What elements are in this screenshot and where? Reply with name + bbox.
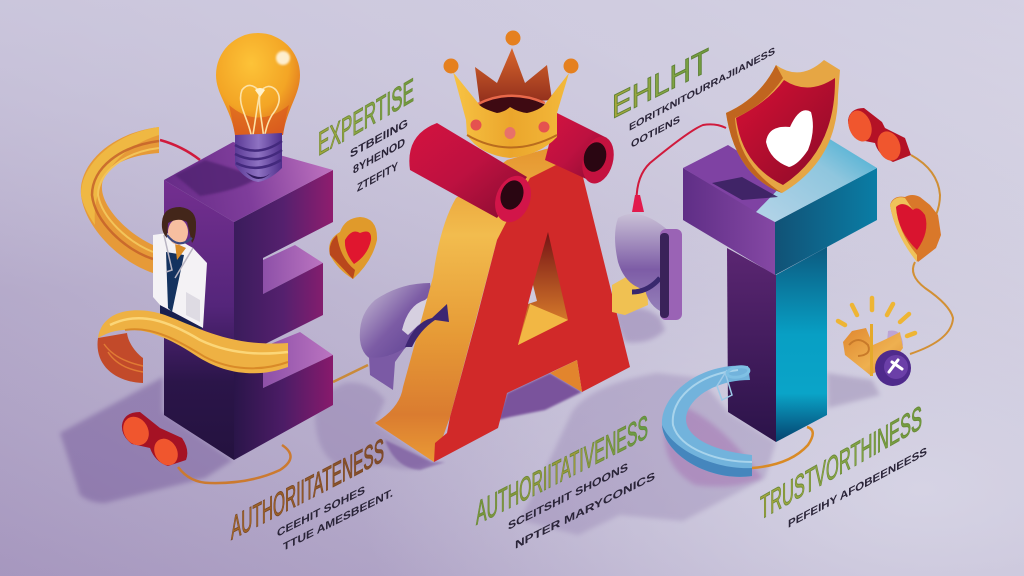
cylinders and crown (409, 30, 619, 227)
T bar left face (683, 168, 775, 275)
A red front (434, 158, 630, 462)
A lower orange notch (550, 360, 582, 392)
floor shadows (60, 308, 880, 535)
right cylinder (545, 113, 619, 187)
text block: centre authoritativeness notes (508, 460, 655, 552)
right clamp (612, 214, 682, 320)
text block: expertise notes (350, 116, 408, 195)
A orange side face (375, 147, 570, 462)
icon: right red connector (844, 107, 911, 164)
T bar right face (775, 168, 877, 275)
E left face (164, 180, 234, 460)
T stem left (727, 248, 776, 442)
left clamp arm (405, 304, 449, 347)
T top blue (756, 138, 877, 222)
E right face (234, 170, 333, 365)
text block: centre authoritativeness notes: SCEITSHIT SHOONS (508, 460, 628, 533)
icon: gold heart with rays and button (838, 298, 915, 386)
text block: expertise notes: STBEIING (350, 116, 408, 161)
ribbon: blue arc (662, 365, 752, 477)
text: AUTHORIITATIVENESS (476, 408, 648, 533)
icon: doctor figure (153, 207, 207, 335)
E top face (164, 142, 333, 222)
text block: left authoritativeness notes: CEEHIT SOHES (277, 483, 365, 540)
T top purple (683, 145, 800, 212)
letter A (375, 147, 630, 462)
ribbon: upper left gold arc (81, 127, 159, 273)
T shield shadow (712, 177, 778, 200)
crown (444, 30, 578, 158)
heading: Expertise: EXPERTISE (318, 71, 414, 163)
E lower arm (234, 332, 333, 460)
text block: trustworthiness notes: PEFEIHY AFOBEENEESS (788, 445, 927, 531)
text block: expertise notes: ZTEFITY (357, 159, 399, 195)
heading: E-A-T: EHLHT (612, 41, 709, 127)
icon: heart with gold frame (890, 195, 941, 262)
text block: expertise notes: 8YHENOD (353, 135, 405, 177)
letter E (164, 142, 333, 460)
text block: left authoritativeness notes: TTUE AMESBEENT. (283, 487, 393, 554)
E middle arm (263, 245, 323, 345)
text block: E-A-T notes: EORITKNITOURRAJIIANESS (629, 45, 775, 134)
left cylinder (409, 123, 537, 227)
E bulb shadow (175, 160, 258, 196)
text block: E-A-T notes: OOTIENS (631, 114, 680, 151)
left clamp shell (360, 283, 434, 390)
icon: shield with heart (726, 60, 840, 193)
icon: small heart (329, 217, 377, 279)
text: AUTHORIITATENESS (231, 431, 384, 548)
icon: left red connector (118, 412, 187, 470)
A inner hole (518, 232, 568, 345)
T stem right (776, 247, 827, 442)
ribbon: lower gold wave (98, 310, 288, 383)
text block: centre authoritativeness notes: NPTER MARYCONICS (515, 469, 655, 552)
icon: light bulb (216, 33, 300, 182)
letter T (683, 138, 877, 442)
wires (160, 124, 953, 483)
